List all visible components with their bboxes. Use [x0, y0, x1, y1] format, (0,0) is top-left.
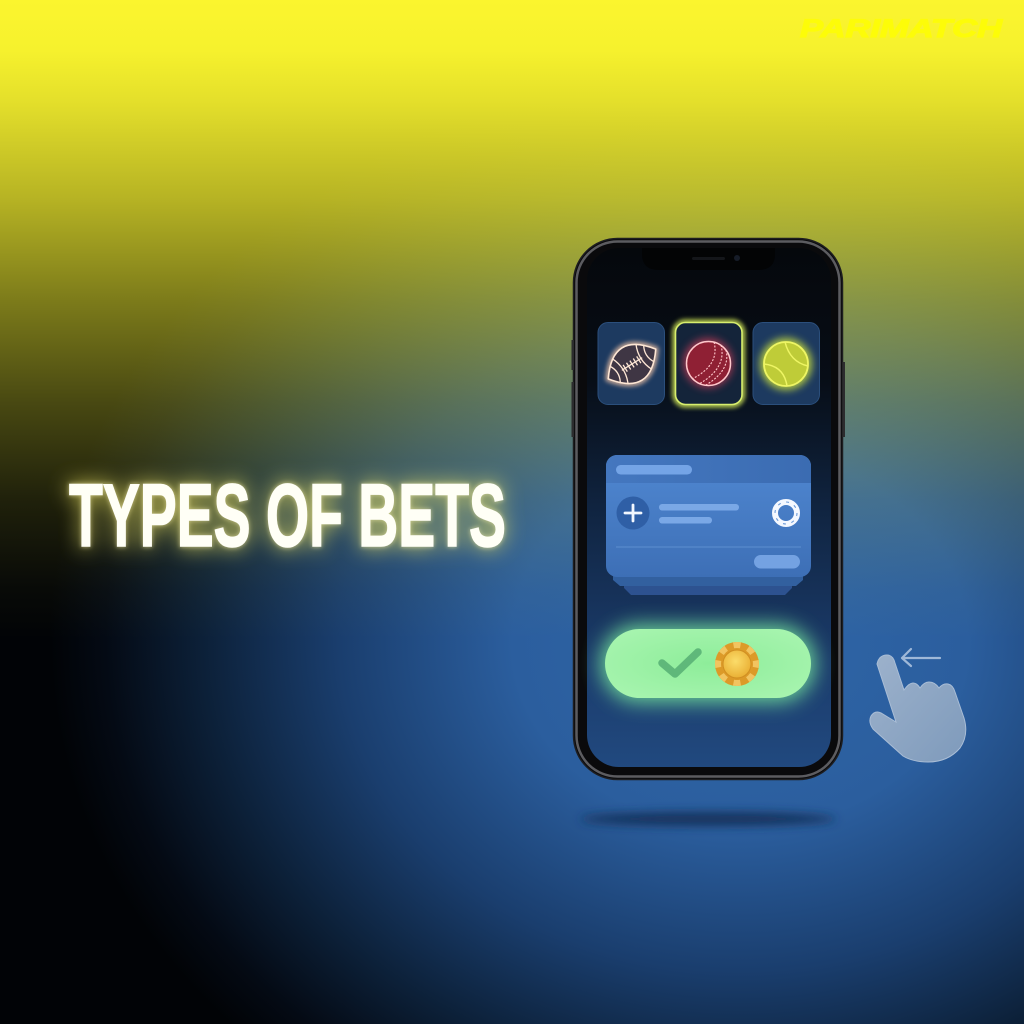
coin chip [715, 642, 759, 686]
plus button [616, 496, 650, 530]
title: TYPES OF BETS: TYPES OF BETS [69, 465, 506, 565]
title: TYPES OF BETS [69, 465, 506, 565]
phone body [574, 238, 842, 780]
title: TYPES OF BETS: TYPES OF BETS [69, 465, 506, 565]
confirm pill [601, 625, 815, 702]
card button [754, 555, 800, 568]
brand logo: PARIMATCH: PARIMATCH [800, 15, 1003, 43]
hand swipe icon [870, 649, 966, 762]
title: TYPES OF BETS: TYPES OF BETS [69, 465, 506, 565]
check mark [662, 652, 698, 674]
phone screen [587, 248, 831, 767]
tile: cricket ball (selected) [676, 322, 742, 404]
swipe arrow [902, 649, 940, 666]
chip icon [775, 502, 797, 524]
notch [642, 248, 775, 270]
card stack layers [624, 580, 792, 595]
phone [572, 238, 845, 780]
tile: football [598, 322, 666, 404]
bet lines [659, 504, 739, 510]
bet card [606, 455, 811, 595]
card header [606, 455, 811, 483]
tile: tennis ball [753, 322, 820, 404]
phone shadow [580, 812, 836, 826]
